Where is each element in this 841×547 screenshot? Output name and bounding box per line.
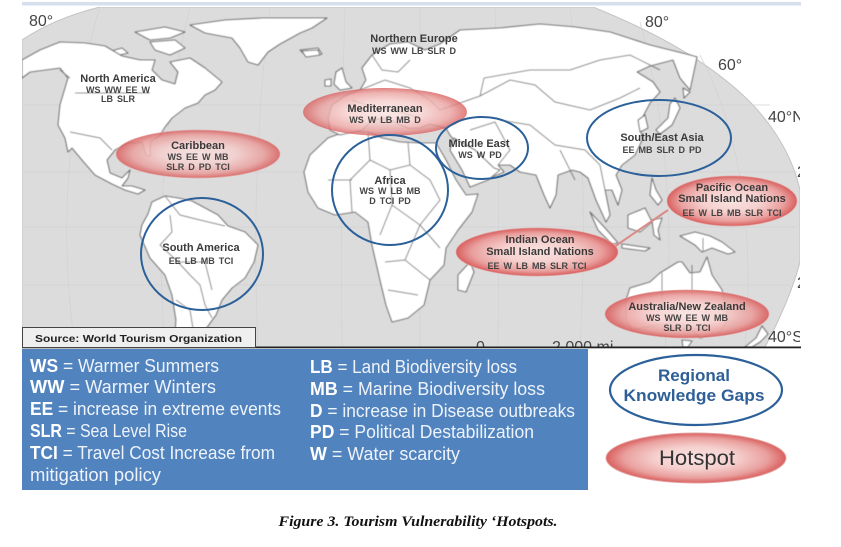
land: Madagascar [458,262,474,292]
world map [22,7,806,356]
land: SE Asia islands [590,178,662,251]
knowledge gap: Middle East [436,117,528,179]
label: North America: North America [80,73,157,85]
key: Hotspot: Hotspot [659,447,735,470]
caption: Figure 3. Tourism Vulnerability ‘Hotspots. [277,514,558,530]
key: Regional Knowledge Gaps: Knowledge Gaps [624,387,764,405]
legend column 2: PD = Political Destabilization [310,421,534,442]
hotspot: Mediterranean: Mediterranean [347,103,423,115]
hotspot: Indian Ocean: EE W LB MB SLR TCI [488,261,586,271]
land: Australia [626,257,728,338]
land: Japan and Korea [638,88,690,134]
legend column 1: TCI = Travel Cost Increase from [30,442,275,463]
hotspot: Caribbean: SLR D PD TCI [166,162,230,172]
source box: Source: World Tourism Organization [35,333,242,345]
knowledge gap: Africa: D TCI PD [369,196,411,206]
label: North America: WS WW EE W [86,85,150,95]
scale bar labels [476,340,612,346]
label: North America [81,74,156,102]
key: Regional Knowledge Gaps [610,355,782,425]
country borders [60,55,703,347]
hotspot: Pacific Ocean: Small Island Nations [678,193,786,205]
degree labels: 40°N [768,109,804,126]
legend column 1 [30,355,281,485]
hotspot: Indian Ocean [456,228,618,276]
legend column 1: SLR = Sea Level Rise [30,420,187,441]
land: Tasmania [682,340,692,347]
legend column 1: WW = Warmer Winters [30,376,216,397]
knowledge gap: Middle East: WS W PD [458,150,502,160]
hotspot: Indian Ocean: Small Island Nations [486,246,594,258]
hotspot: Pacific Ocean [667,176,797,226]
key: Regional Knowledge Gaps: Regional [658,367,730,385]
scale bar labels: 2,000 mi [552,339,613,356]
legend column 1: WS = Warmer Summers [30,355,219,376]
land: Eurasia [328,24,697,222]
legend column 2: LB = Land Biodiversity loss [310,356,517,377]
legend panel [22,349,588,490]
land: Greenland [190,18,327,65]
land: Britain and Iceland [302,50,352,90]
legend column 2: D = increase in Disease outbreaks [310,400,575,421]
hotspot: Australia/New Zealand [605,290,769,338]
connector line between island hotspots [614,210,668,247]
graticule [22,7,797,347]
hotspot: Indian Ocean: Indian Ocean [505,234,575,246]
key: Hotspot [606,433,786,483]
hotspot: Caribbean: Caribbean [171,140,225,152]
legend column 1: mitigation policy [30,464,162,485]
land: Arabia [450,138,500,187]
label: Northern Europe: WS WW LB SLR D [372,46,456,56]
scale bar labels: 0 [476,339,485,356]
hotspot: Australia/New Zealand: SLR D TCI [664,323,710,333]
label: Northern Europe: Northern Europe [370,33,458,45]
land: New Zealand [745,326,768,347]
degree labels: 80° [29,13,53,30]
hotspot: Pacific Ocean: EE W LB MB SLR TCI [682,208,782,218]
knowledge gap: South America [141,198,263,310]
degree labels: 80° [645,14,669,31]
land: Arctic islands [108,27,322,56]
hotspot: Caribbean [116,130,280,178]
knowledge gap: Middle East: Middle East [448,138,510,150]
hotspot: Mediterranean [303,88,467,136]
hotspot: Pacific Ocean: Pacific Ocean [696,182,768,194]
hotspot: Australia/New Zealand: Australia/New Zealand [628,301,746,313]
land: New Guinea [680,232,735,254]
hotspot: Caribbean: WS EE W MB [168,152,229,162]
degree labels: 40°S [768,329,803,346]
knowledge gap: South America: South America [162,242,240,254]
legend column 2: W = Water scarcity [310,443,461,464]
land masses [22,18,768,347]
top rule [22,2,801,6]
knowledge gap: Africa: WS W LB MB [360,186,421,196]
land: Africa [304,132,478,322]
knowledge gap: South/East Asia [587,100,731,176]
knowledge gap: Africa [332,135,448,245]
knowledge gap: South/East Asia: EE MB SLR D PD [622,145,702,155]
knowledge gap: South America: EE LB MB TCI [169,256,233,266]
label: Northern Europe [371,34,458,54]
land: South America [138,195,259,327]
hotspot: Australia/New Zealand: WS WW EE W MB [646,313,728,323]
map background [22,7,800,347]
legend column 1: EE = increase in extreme events [30,398,281,419]
knowledge gap: South/East Asia: South/East Asia [620,132,705,144]
label: North America: LB SLR [101,94,135,104]
degree labels: 2 [797,275,806,292]
legend column 2: MB = Marine Biodiversity loss [310,378,545,399]
degree labels [29,13,806,346]
hotspot: Mediterranean: WS W LB MB D [349,115,421,125]
map base line [22,346,801,348]
legend column 2 [310,356,575,464]
degree labels: 60° [718,57,742,74]
land: North America [22,42,222,194]
knowledge gap: Africa: Africa [374,175,406,187]
source box [22,328,256,348]
degree labels: 2 [797,164,806,181]
